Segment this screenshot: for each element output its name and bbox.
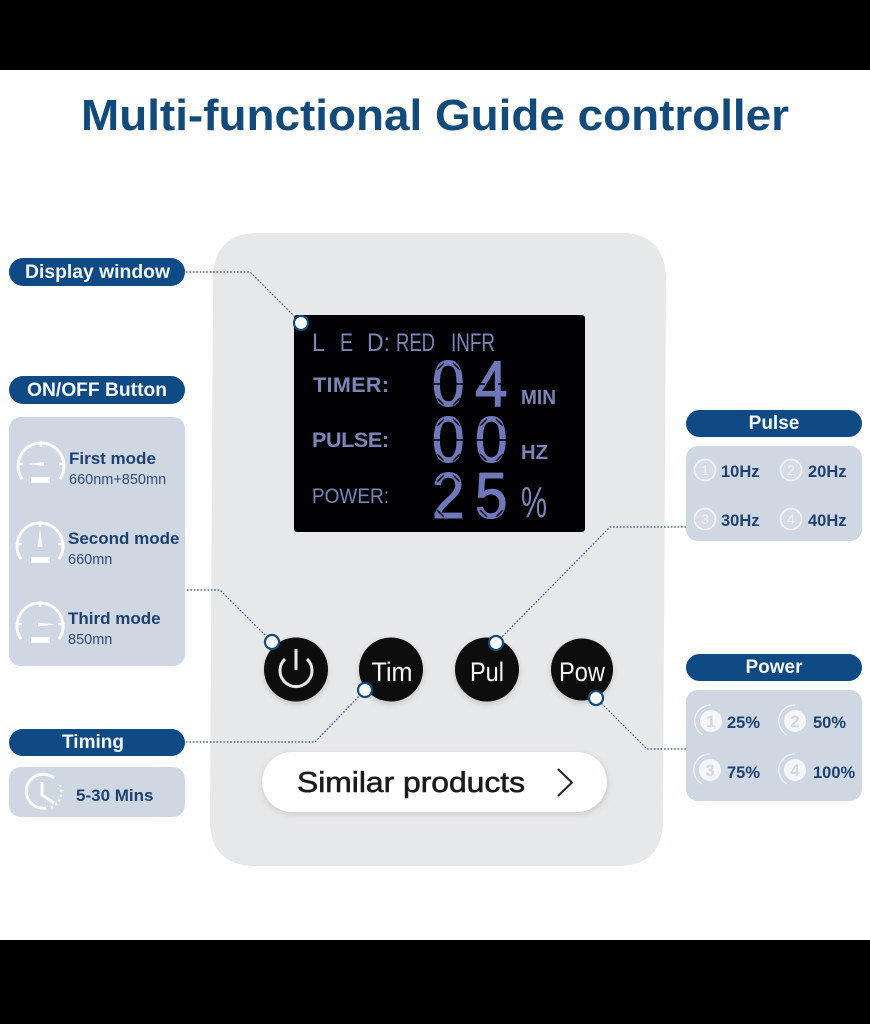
led row: RED [396, 329, 435, 357]
20hz: 20Hz [808, 463, 847, 481]
panel: power options [686, 690, 862, 801]
40hz: 4 [787, 511, 795, 527]
timer value: 4 [475, 348, 508, 421]
50 percent [779, 705, 846, 735]
panel: on/off modes [9, 417, 185, 666]
pulse value [432, 404, 508, 477]
label: display window: Display window [25, 262, 170, 283]
icon: clock [26, 774, 61, 808]
connector: power [596, 698, 686, 749]
led row: D: [367, 329, 390, 357]
label: power [686, 654, 862, 681]
25 percent: 1 [706, 712, 716, 731]
10hz: 1 [701, 462, 709, 478]
50 percent: 2 [790, 712, 800, 731]
75 percent: 75% [727, 764, 760, 782]
led row: L [312, 329, 325, 357]
pulse button: Pul [470, 657, 504, 687]
led row: INFR [451, 329, 495, 357]
label: pulse [686, 410, 862, 437]
timer button [359, 638, 423, 704]
connector: pulse [496, 527, 686, 643]
third mode: Third mode [68, 609, 161, 628]
first mode: 660nm+850mn [69, 472, 166, 488]
top black band [0, 0, 870, 70]
30hz: 30Hz [721, 512, 760, 530]
marker: timing [358, 683, 372, 697]
30hz: 3 [701, 511, 709, 527]
20hz [780, 460, 847, 481]
label: power: Power [745, 657, 803, 678]
power value: 2 [432, 460, 465, 533]
marker: power [589, 691, 603, 705]
label: timing: Timing [62, 732, 124, 753]
power level button [551, 638, 613, 703]
25 percent [695, 705, 760, 735]
10hz [694, 460, 760, 481]
similar products pill: Similar products [297, 767, 525, 799]
label: on/off button [9, 376, 185, 404]
third mode: 850mn [68, 632, 112, 648]
panel: controller body [210, 233, 666, 866]
pulse value: 0 [432, 404, 465, 477]
connector: timing [186, 690, 365, 742]
40hz [780, 508, 847, 530]
bottom black band [0, 940, 870, 1024]
led row: E [340, 329, 353, 357]
40hz: 40Hz [808, 512, 847, 530]
timer value: 0 [432, 348, 465, 421]
25 percent: 25% [727, 714, 760, 732]
second mode: 660mn [68, 552, 112, 568]
50 percent: 50% [813, 714, 846, 732]
100 percent: 100% [813, 764, 856, 782]
connector: on/off button [187, 590, 272, 642]
timer value [432, 348, 508, 421]
marker: on/off button [265, 635, 279, 649]
label: display window [9, 258, 185, 286]
hz unit: HZ [521, 442, 548, 464]
first mode [17, 441, 166, 488]
30hz [694, 508, 760, 530]
power value: 5 [475, 460, 508, 533]
panel: timing: 5-30 Mins [76, 786, 153, 805]
power value [432, 460, 508, 533]
percent unit: % [521, 478, 547, 527]
100 percent: 4 [790, 761, 800, 780]
timer button: Tim [372, 657, 412, 687]
pulse label: PULSE: [312, 428, 389, 452]
panel: pulse options [686, 446, 862, 541]
third mode [16, 601, 161, 648]
75 percent: 3 [705, 761, 715, 780]
label: on/off button: ON/OFF Button [27, 380, 167, 401]
label: timing [9, 729, 185, 756]
marker: pulse [489, 636, 503, 650]
led row [312, 329, 495, 357]
label: pulse: Pulse [749, 413, 799, 434]
min unit: MIN [521, 387, 556, 409]
title: Multi-functional Guide controller [81, 91, 789, 140]
first mode: First mode [69, 449, 156, 468]
power label: POWER: [312, 484, 389, 508]
20hz: 2 [787, 462, 795, 478]
marker: display window [294, 316, 308, 330]
connector: display window [186, 272, 301, 323]
power level button: Pow [559, 657, 605, 687]
display screen [294, 315, 585, 533]
75 percent [694, 754, 760, 784]
10hz: 10Hz [721, 463, 760, 481]
second mode [16, 521, 179, 568]
power button [264, 638, 328, 704]
pulse value: 0 [475, 404, 508, 477]
second mode: Second mode [68, 529, 179, 548]
panel: timing [9, 767, 185, 817]
similar products pill [262, 752, 608, 814]
100 percent [779, 754, 856, 784]
timer label: TIMER: [313, 373, 389, 397]
pulse button [455, 638, 519, 704]
